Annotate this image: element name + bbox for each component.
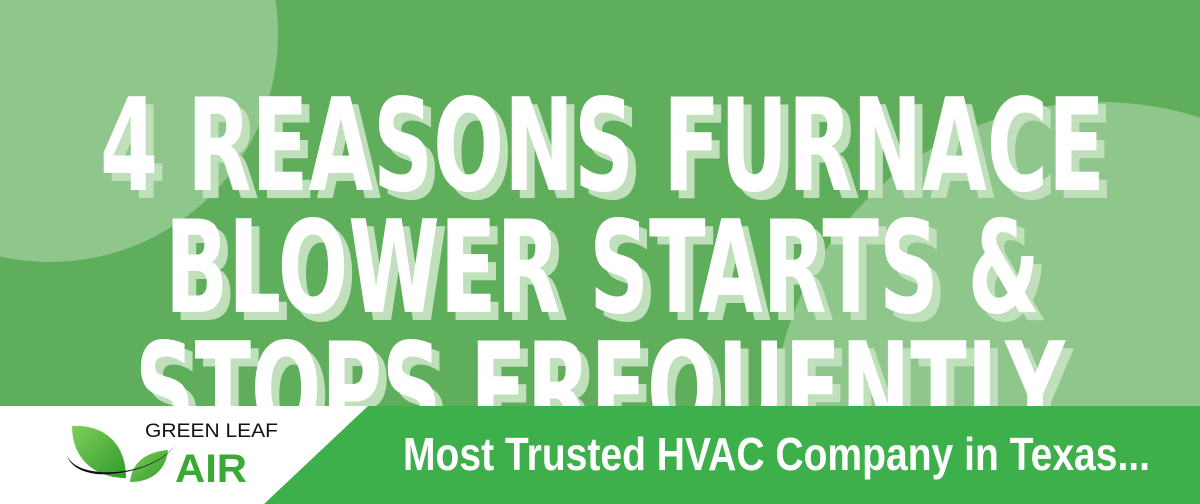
footer bar bbox=[0, 406, 1200, 504]
logo text: GREEN LEAF bbox=[145, 421, 278, 442]
icon: leaves bbox=[67, 426, 176, 482]
title bbox=[104, 95, 1107, 406]
logo bbox=[67, 421, 278, 491]
logo: AIR bbox=[175, 447, 247, 491]
decorative circle top-left bbox=[0, 0, 278, 262]
decorative circle right bbox=[772, 102, 1200, 504]
